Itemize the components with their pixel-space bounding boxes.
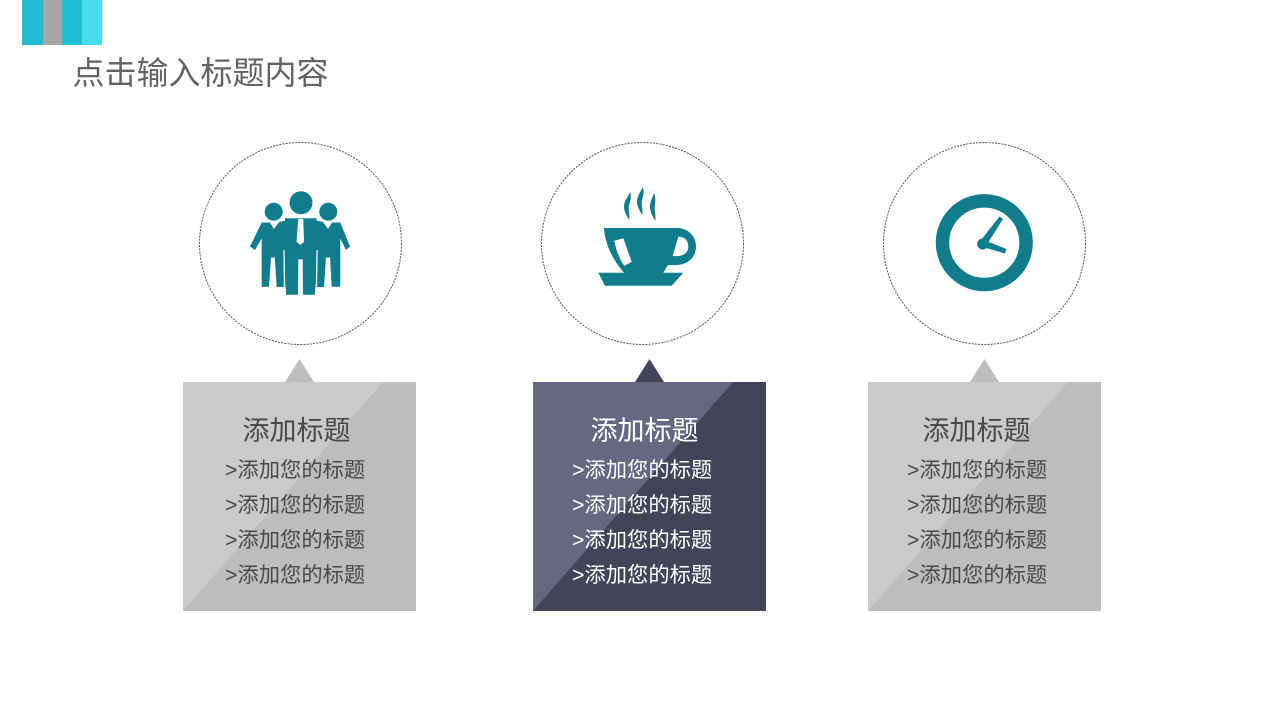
dashed circle 2 xyxy=(542,142,744,344)
card 2 item 2: >添加您的标题 xyxy=(572,493,712,517)
card 1 item 1: >添加您的标题 xyxy=(225,458,365,482)
card 3 item 1: >添加您的标题 xyxy=(907,458,1047,482)
card 1 text xyxy=(225,416,365,587)
card 2 background xyxy=(533,382,766,611)
card 3 heading: 添加标题 xyxy=(922,416,1030,446)
icon: team of people xyxy=(250,191,350,295)
icon: steaming coffee cup xyxy=(598,187,696,286)
dashed circle 3 xyxy=(884,142,1086,344)
card 1 background xyxy=(183,382,416,611)
card 1 item 3: >添加您的标题 xyxy=(225,528,365,552)
card 2 item 1: >添加您的标题 xyxy=(572,458,712,482)
card 3 text xyxy=(907,416,1047,587)
card 1 item 4: >添加您的标题 xyxy=(225,563,365,587)
card 3 item 2: >添加您的标题 xyxy=(907,493,1047,517)
card 3 item 4: >添加您的标题 xyxy=(907,563,1047,587)
card 3 item 3: >添加您的标题 xyxy=(907,528,1047,552)
card 3 background xyxy=(868,382,1101,611)
card 2 item 3: >添加您的标题 xyxy=(572,528,712,552)
title: 点击输入标题内容 xyxy=(72,55,329,91)
icon: clock xyxy=(942,201,1026,284)
card 2 item 4: >添加您的标题 xyxy=(572,563,712,587)
card 2 text xyxy=(572,416,712,587)
card 1 item 2: >添加您的标题 xyxy=(225,493,365,517)
card 2 heading: 添加标题 xyxy=(590,416,698,446)
card 1 heading: 添加标题 xyxy=(242,416,350,446)
card 1 pointer xyxy=(285,359,314,382)
card 3 pointer xyxy=(970,359,999,382)
logo color bars xyxy=(22,0,102,45)
dashed circle 1 xyxy=(200,142,402,344)
card 2 pointer xyxy=(635,359,664,382)
